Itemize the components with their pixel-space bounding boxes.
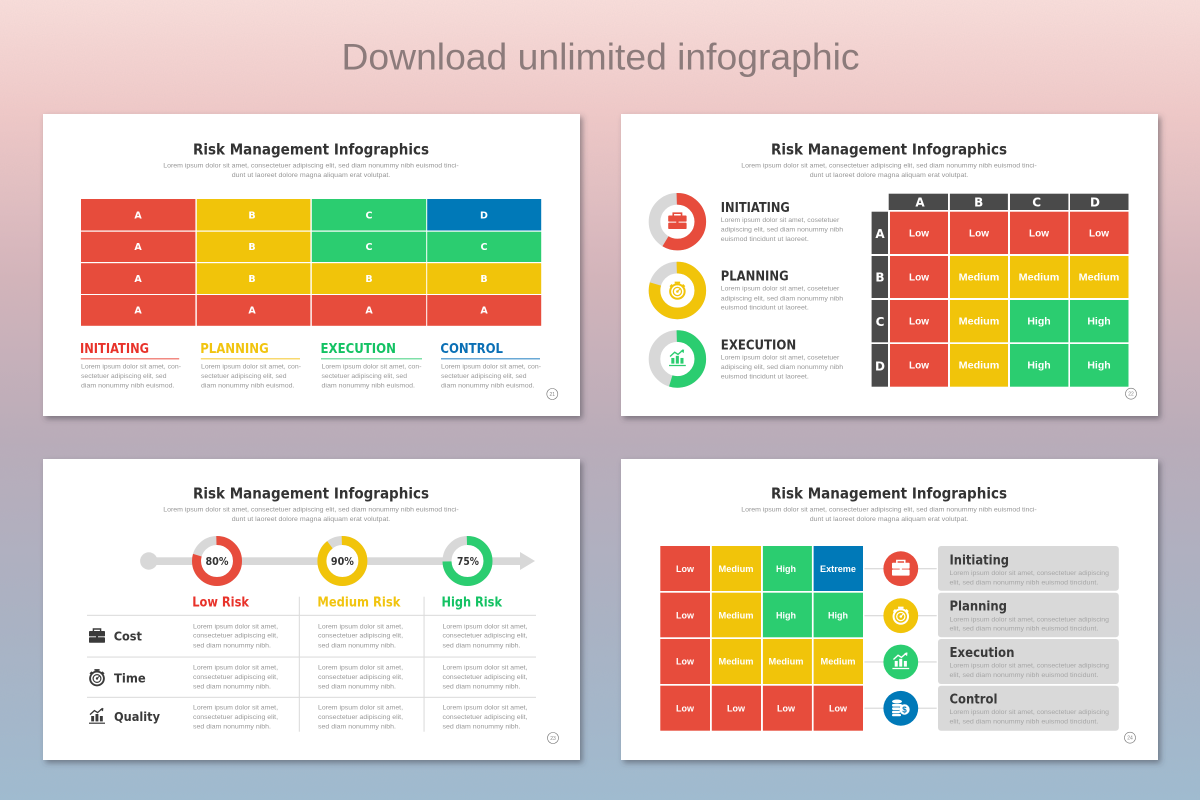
label: execution: Lorem ipsum dolor sit amet, consectetuer adipiscing [950, 663, 1109, 670]
table: A B C D grid: A [134, 306, 142, 316]
label: planning: elit, sed diam nonummy nibh euismod tincidunt. [950, 626, 1098, 633]
icon: stopwatch circle [883, 598, 918, 633]
text: initiating: euismod tincidunt ut laoreet. [721, 236, 809, 243]
heading: high risk: High Risk [442, 596, 502, 610]
table: A B C D grid: A [248, 306, 256, 316]
label: initiating: elit, sed diam nonummy nibh euismod tincidunt. [950, 579, 1098, 586]
risk matrix: B [974, 196, 983, 210]
slide title: Risk Management Infographics [193, 141, 429, 159]
table: A B C D grid: B [248, 274, 256, 285]
page number 21 [547, 388, 558, 400]
risk matrix: Low [676, 564, 695, 574]
column: control: diam nonummy nibh euismod. [441, 382, 535, 390]
risk matrix: High [1087, 317, 1111, 328]
page number 22 [1126, 388, 1136, 399]
panel: slide 21 colour table [43, 114, 580, 416]
label: initiating: Lorem ipsum dolor sit amet, consectetuer adipiscing [950, 570, 1109, 577]
row: quality: Lorem ipsum dolor sit amet, [318, 705, 403, 712]
table: A B C D grid: B [248, 242, 256, 253]
page number 23: 23 [550, 736, 556, 742]
text: execution: euismod tincidunt ut laoreet. [721, 373, 809, 380]
page number 24 [1124, 732, 1136, 743]
text: initiating: INITIATING [721, 201, 790, 216]
slide subtitle: dunt ut laoreet dolore magna aliquam erat volutpat. [810, 172, 968, 179]
risk matrix: Low [676, 657, 695, 667]
risk matrix: Medium [1079, 273, 1119, 284]
table: A B C D grid: A [365, 306, 373, 316]
donut: initiating [654, 199, 700, 245]
column: planning: sectetuer adipiscing elit, sed [201, 373, 287, 380]
row: time: consectetuer adipiscing elit, [318, 674, 403, 681]
page number 24: 24 [1127, 736, 1133, 742]
label: execution [938, 639, 1119, 684]
heading: low risk: Low Risk [192, 596, 249, 610]
label: initiating: Initiating [950, 554, 1009, 569]
page number 23 [548, 732, 558, 744]
risk matrix: A [915, 196, 925, 210]
text: initiating: adipiscing elit, sed diam nonummy nibh [721, 227, 843, 234]
risk matrix: Medium [820, 657, 856, 667]
text: initiating: Lorem ipsum dolor sit amet, cosetetuer [721, 217, 840, 224]
column: execution: diam nonummy nibh euismod. [322, 382, 415, 390]
risk matrix: Low [909, 361, 929, 372]
donut: 75% [447, 540, 488, 582]
risk matrix: Medium [1019, 273, 1059, 284]
slide subtitle [163, 507, 459, 523]
page number 22: 22 [1128, 392, 1134, 398]
risk matrix: High [776, 564, 796, 574]
risk matrix: Medium [718, 610, 754, 620]
column: planning: Lorem ipsum dolor sit amet, con- [201, 364, 301, 370]
label: control: Control [950, 692, 998, 707]
risk matrix: A [875, 227, 885, 241]
risk matrix: Low [777, 703, 796, 713]
row: quality: Lorem ipsum dolor sit amet, [193, 705, 278, 712]
table: A B C D grid: A [134, 210, 142, 222]
text: execution: adipiscing elit, sed diam nonummy nibh [721, 364, 843, 371]
slide subtitle: Lorem ipsum dolor sit amet, consectetuer adipiscing elit, sed diam nonummy nibh euismod tinci- [741, 507, 1037, 514]
slide subtitle [741, 162, 1037, 179]
label: planning: Planning [950, 600, 1007, 615]
risk matrix: Low [727, 703, 746, 713]
row: quality: consectetuer adipiscing elit, [442, 714, 528, 721]
table: A B C D grid: D [480, 210, 488, 222]
label: planning: Lorem ipsum dolor sit amet, consectetuer adipiscing [950, 616, 1109, 623]
column: initiating [80, 342, 181, 390]
text: execution [721, 338, 843, 380]
label: planning [938, 593, 1119, 637]
text: planning: Lorem ipsum dolor sit amet, cosetetuer [721, 286, 840, 293]
text: planning: adipiscing elit, sed diam nonummy nibh [721, 295, 843, 302]
row: time: Lorem ipsum dolor sit amet, [318, 665, 403, 672]
row: cost: sed diam nonummy nibh. [318, 642, 396, 649]
risk matrix: Medium [959, 273, 999, 284]
column: planning: diam nonummy nibh euismod. [201, 382, 295, 390]
risk matrix: High [828, 610, 848, 620]
column: planning [200, 342, 301, 390]
donut: execution [654, 336, 700, 382]
page number 21: 21 [550, 392, 555, 398]
risk matrix [872, 194, 1128, 387]
row: time: Lorem ipsum dolor sit amet, [193, 665, 278, 672]
text: planning: PLANNING [721, 270, 789, 285]
row: time: sed diam nonummy nibh. [318, 684, 396, 691]
table: A B C D grid: A [480, 306, 488, 316]
icon: chart circle [883, 645, 918, 679]
main heading: Download unlimited infographic [342, 36, 860, 78]
risk matrix [660, 546, 863, 731]
row: cost: consectetuer adipiscing elit, [193, 633, 278, 640]
row: time: consectetuer adipiscing elit, [193, 674, 278, 681]
slide subtitle: Lorem ipsum dolor sit amet, consectetuer adipiscing elit, sed diam nonummy nibh euismod tinci- [163, 507, 459, 514]
donut: 80% [196, 540, 238, 582]
donut: 90%: 90% [331, 556, 354, 568]
label: control: elit, sed diam nonummy nibh euismod tincidunt. [950, 718, 1098, 725]
text: planning [721, 270, 843, 312]
label: initiating [938, 546, 1119, 591]
table: A B C D grid: B [248, 210, 256, 222]
panel: slide 22 donuts and risk matrix [621, 114, 1158, 416]
risk matrix: High [1087, 361, 1111, 372]
risk matrix: Low [1089, 229, 1109, 240]
row: time: Time [114, 670, 146, 686]
risk matrix: Low [676, 610, 695, 620]
arrow: timeline [140, 552, 535, 570]
column: control: sectetuer adipiscing elit, sed [441, 373, 527, 380]
column: planning: PLANNING [200, 342, 269, 357]
risk matrix: Low [909, 317, 929, 328]
row: time: sed diam nonummy nibh. [193, 684, 271, 691]
row: quality: consectetuer adipiscing elit, [193, 714, 278, 721]
risk matrix: Low [909, 229, 929, 240]
table: A B C D grid: A [134, 242, 142, 253]
slide subtitle [163, 162, 459, 179]
risk matrix: Medium [718, 657, 754, 667]
risk matrix: High [1027, 361, 1051, 372]
icon: coins circle [883, 691, 918, 726]
slide title: Risk Management Infographics [771, 485, 1007, 503]
label: execution: Execution [950, 646, 1014, 661]
risk matrix: B [875, 270, 885, 284]
slide subtitle: dunt ut laoreet dolore magna aliquam erat volutpat. [232, 516, 390, 523]
row: cost: consectetuer adipiscing elit, [442, 633, 528, 640]
row: quality: sed diam nonummy nibh. [193, 724, 271, 731]
donut: planning [654, 268, 700, 313]
risk matrix: D [1090, 196, 1100, 210]
icon: briefcase circle [883, 551, 918, 586]
heading: medium risk: Medium Risk [317, 596, 401, 610]
risk matrix: Medium [959, 317, 999, 328]
slide subtitle: Lorem ipsum dolor sit amet, consectetuer adipiscing elit, sed diam nonummy nibh euismod tinci- [741, 162, 1037, 170]
column: initiating: INITIATING [80, 342, 149, 357]
row: cost: Cost [114, 628, 142, 644]
row: time: sed diam nonummy nibh. [442, 684, 521, 691]
row: quality: consectetuer adipiscing elit, [318, 714, 403, 721]
risk matrix: Medium [768, 657, 804, 667]
column: control [440, 342, 541, 390]
table: A B C D grid: C [366, 242, 373, 253]
row: quality: sed diam nonummy nibh. [442, 724, 521, 731]
row: quality: Quality [114, 709, 160, 724]
risk matrix: High [1027, 317, 1051, 328]
risk matrix: Low [909, 273, 929, 284]
column: execution [320, 342, 422, 390]
column: initiating: sectetuer adipiscing elit, sed [81, 373, 167, 380]
column: execution: sectetuer adipiscing elit, sed [322, 373, 407, 380]
table rules [87, 597, 536, 732]
label: execution: elit, sed diam nonummy nibh euismod tincidunt. [950, 672, 1098, 679]
column: initiating: diam nonummy nibh euismod. [81, 382, 175, 390]
row: cost: Lorem ipsum dolor sit amet, [442, 623, 528, 630]
row: cost: sed diam nonummy nibh. [193, 642, 271, 649]
row: quality: sed diam nonummy nibh. [318, 724, 396, 731]
risk matrix: Extreme [820, 564, 856, 574]
row: quality: Lorem ipsum dolor sit amet, [442, 705, 528, 712]
donut: 90% [322, 540, 363, 582]
table: A B C D grid: B [365, 274, 373, 285]
row: time [90, 665, 528, 691]
donut: 80%: 80% [206, 556, 229, 568]
label: control: Lorem ipsum dolor sit amet, consectetuer adipiscing [950, 709, 1109, 716]
text: execution: EXECUTION [721, 338, 796, 353]
slide subtitle: Lorem ipsum dolor sit amet, consectetuer adipiscing elit, sed diam nonummy nibh euismod tinci- [163, 162, 459, 170]
risk matrix: Medium [718, 564, 754, 574]
table: A B C D grid [81, 199, 541, 326]
column: control: Lorem ipsum dolor sit amet, con- [441, 364, 541, 370]
column: execution: EXECUTION [320, 342, 396, 357]
connector lines [864, 568, 937, 709]
risk matrix: C [876, 315, 885, 329]
icon: coins circle: $ [902, 706, 907, 714]
slide subtitle: dunt ut laoreet dolore magna aliquam erat volutpat. [810, 516, 968, 523]
risk matrix: High [776, 610, 796, 620]
risk matrix: Low [969, 229, 989, 240]
label: control [938, 686, 1119, 731]
row: time: Lorem ipsum dolor sit amet, [442, 665, 528, 672]
slide title: Risk Management Infographics [193, 485, 429, 503]
row: cost: Lorem ipsum dolor sit amet, [318, 623, 403, 630]
table: A B C D grid: B [480, 274, 488, 285]
risk matrix: Low [1029, 229, 1049, 240]
text: planning: euismod tincidunt ut laoreet. [721, 305, 809, 312]
column: initiating: Lorem ipsum dolor sit amet, con- [81, 364, 181, 370]
table: A B C D grid: C [481, 242, 488, 253]
risk matrix: Low [676, 703, 695, 713]
risk matrix: Medium [959, 361, 999, 372]
donut: 75%: 75% [457, 556, 479, 568]
table: A B C D grid: C [366, 210, 373, 222]
text: initiating [721, 201, 843, 243]
panel: slide 24 matrix and labels [621, 459, 1158, 760]
column: control: CONTROL [440, 342, 503, 357]
slide title: Risk Management Infographics [771, 141, 1007, 159]
row: quality [89, 705, 528, 731]
row: cost: Lorem ipsum dolor sit amet, [193, 623, 278, 630]
panel: slide 23 risk timeline [43, 459, 580, 760]
risk matrix: Low [829, 703, 848, 713]
slide subtitle [741, 507, 1037, 523]
row: cost: consectetuer adipiscing elit, [318, 633, 403, 640]
risk matrix: D [875, 359, 885, 373]
text: execution: Lorem ipsum dolor sit amet, cosetetuer [721, 354, 840, 361]
risk matrix: C [1032, 196, 1041, 210]
table: A B C D grid: A [134, 274, 142, 285]
row: cost [89, 623, 528, 649]
row: time: consectetuer adipiscing elit, [442, 674, 528, 681]
column: execution: Lorem ipsum dolor sit amet, con- [322, 364, 422, 370]
row: cost: sed diam nonummy nibh. [442, 642, 521, 649]
slide subtitle: dunt ut laoreet dolore magna aliquam erat volutpat. [232, 172, 390, 179]
